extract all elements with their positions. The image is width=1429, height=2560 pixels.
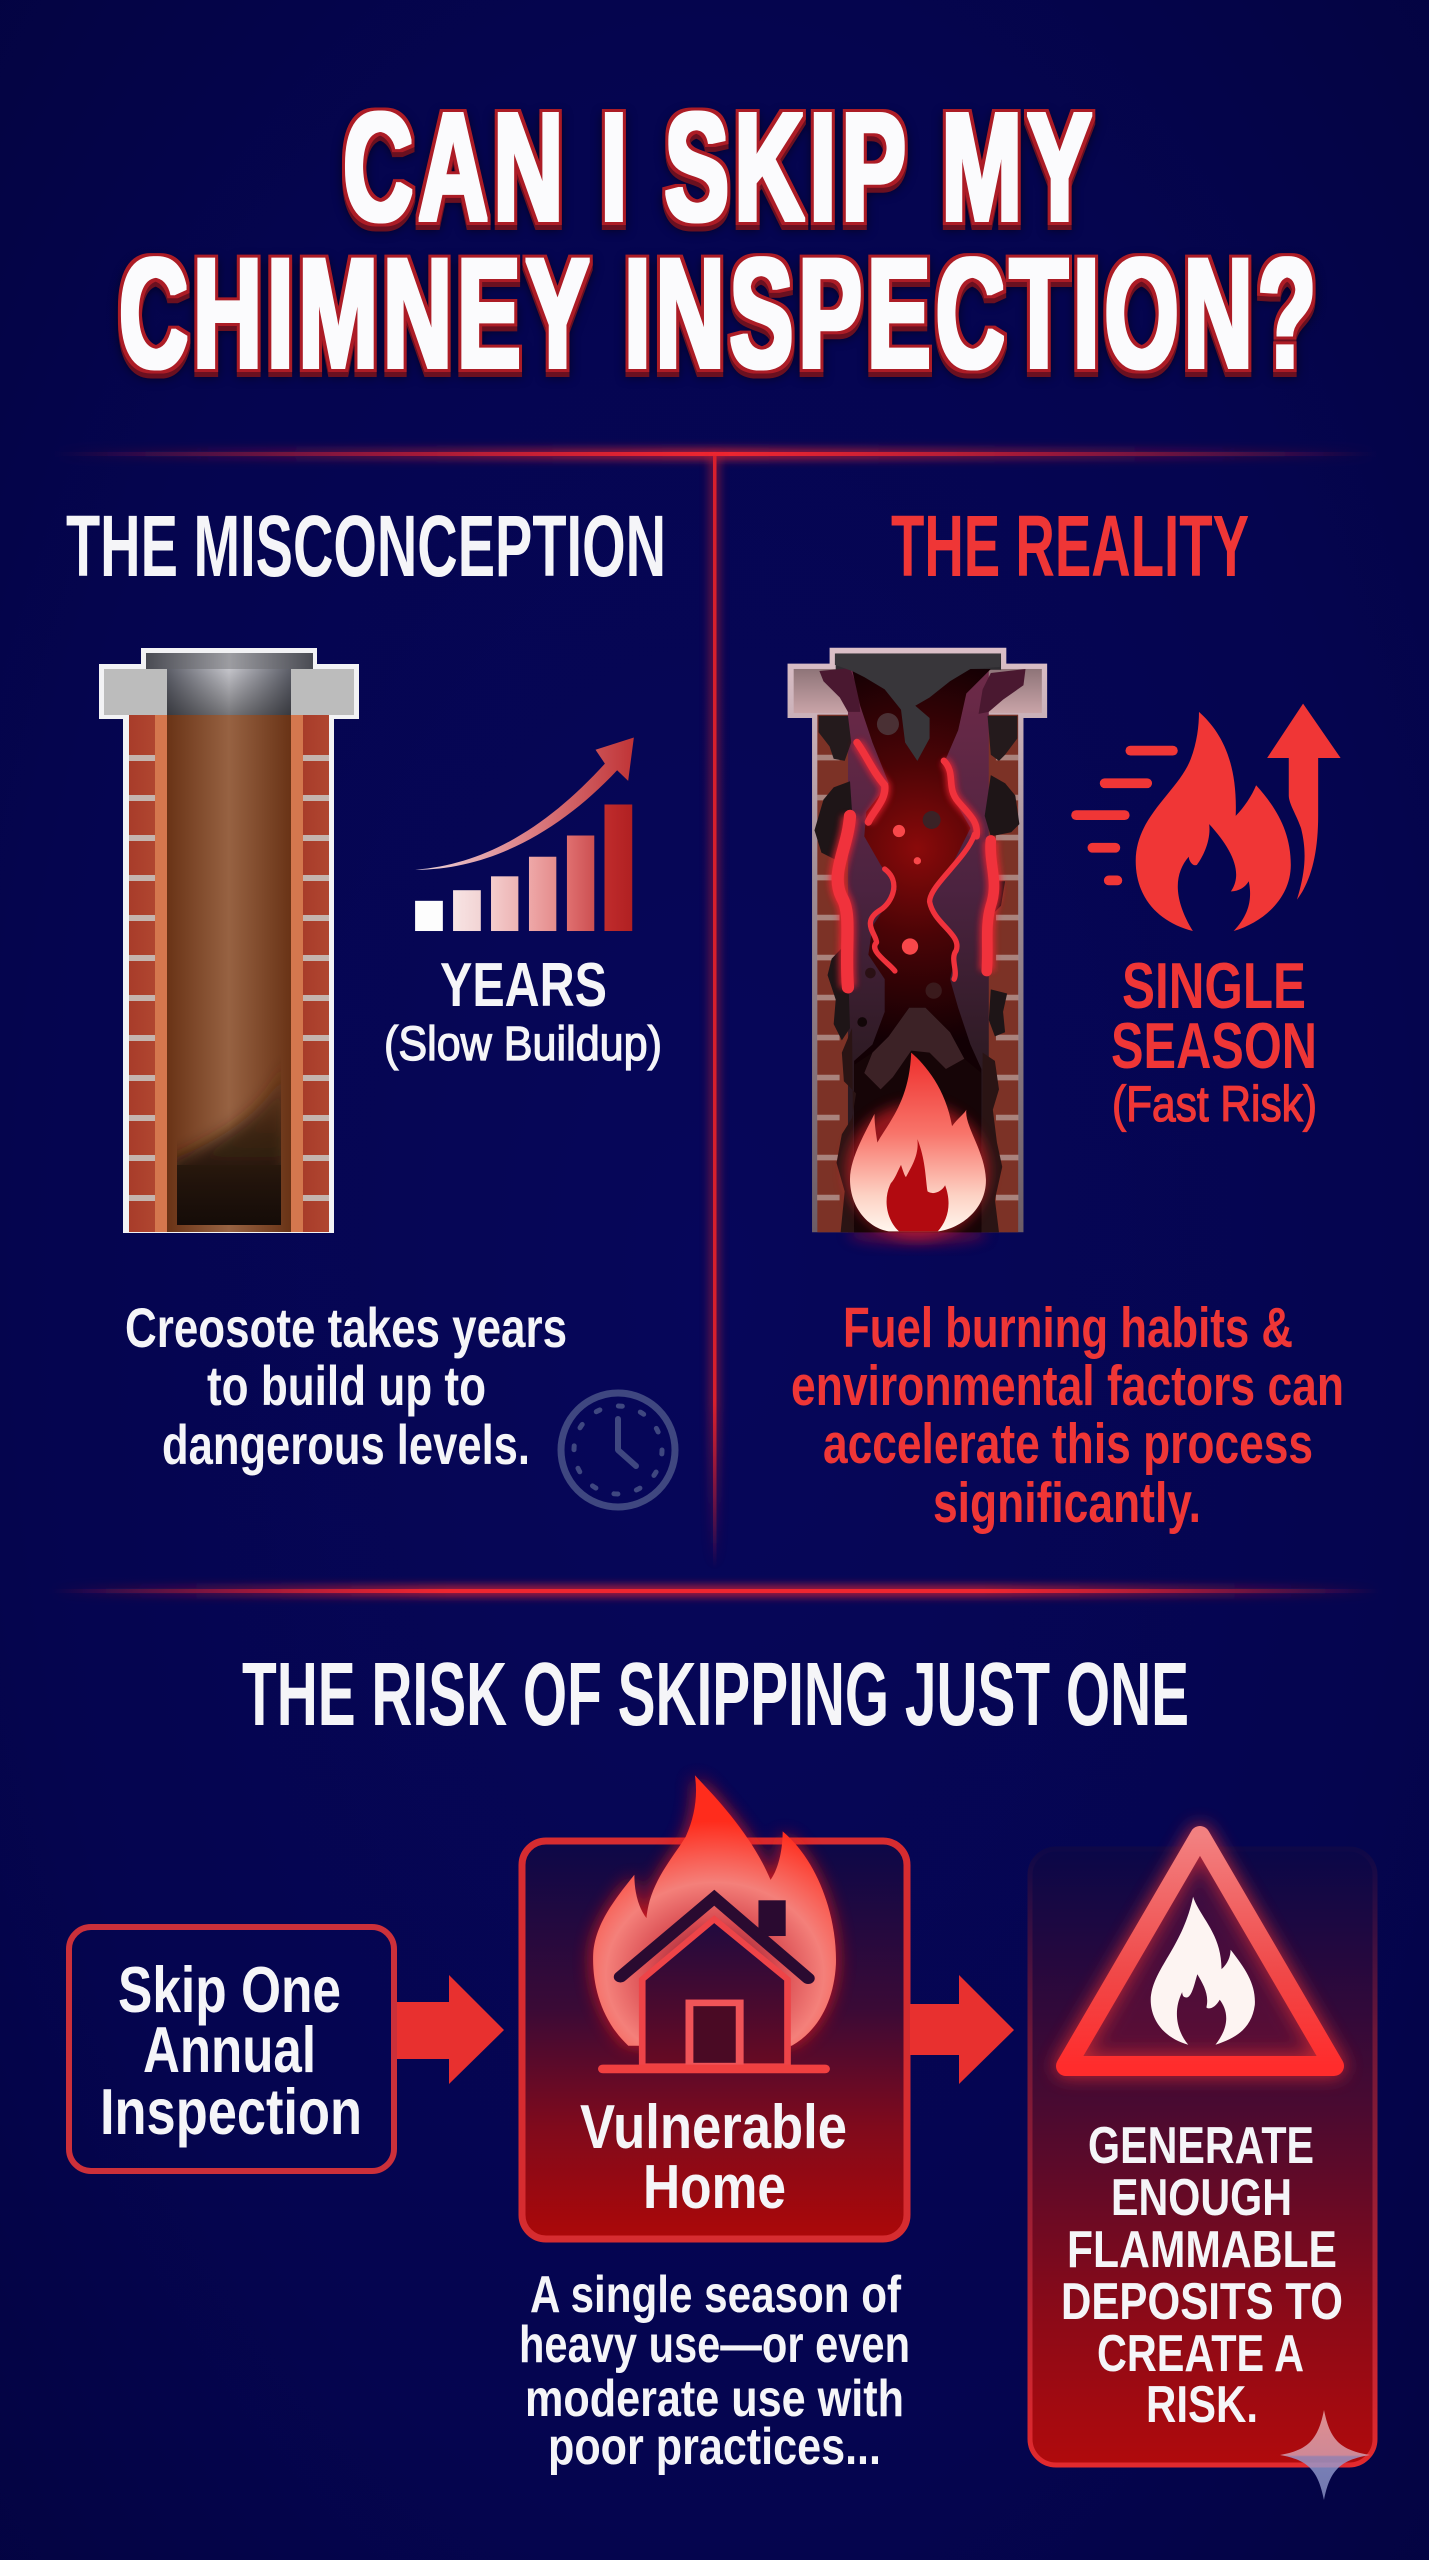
box: skip one annual inspection: Inspection (100, 2075, 362, 2148)
arrow: vulnerable to risk (910, 1975, 1014, 2084)
icon: warning triangle with flame (1066, 1836, 1334, 2066)
label: single season (1111, 949, 1317, 1132)
box: vulnerable home: Home (643, 2153, 786, 2222)
bar chart: slow buildup (415, 738, 634, 931)
label: years: YEARS (440, 951, 607, 1020)
box: skip one annual inspection: Skip One (118, 1953, 341, 2026)
box: vulnerable home (522, 1775, 907, 2239)
top divider (55, 450, 1376, 458)
label: single season: SINGLE (1122, 949, 1306, 1022)
text: creosote: Creosote takes years (125, 1296, 567, 1359)
panel: the reality (788, 498, 1344, 1535)
text: single season of heavy use: A single season of (530, 2266, 902, 2324)
label: single season: (Fast Risk) (1112, 1076, 1317, 1132)
vertical divider (710, 456, 719, 1568)
panel: the risk of skipping just one (69, 1645, 1375, 2476)
illustration: clean chimney cross-section (99, 648, 359, 1233)
panel: the misconception (66, 498, 675, 1507)
text: generate enough flammable deposits: ENOUGH (1111, 2169, 1292, 2227)
text: generate enough flammable deposits: DEPOSITS TO (1061, 2273, 1343, 2331)
icon: clock (561, 1393, 675, 1507)
text: single season of heavy use (519, 2266, 910, 2476)
text: creosote: dangerous levels. (162, 1413, 530, 1476)
text: creosote: to build up to (207, 1354, 486, 1417)
text: single season of heavy use: heavy use—or even (519, 2316, 910, 2374)
box: skip one annual inspection: Annual (143, 2013, 316, 2086)
arrow: skip to vulnerable (397, 1975, 504, 2084)
middle divider (51, 1587, 1380, 1595)
text: creosote (125, 1296, 567, 1476)
heading: the misconception: THE MISCONCEPTION (66, 498, 666, 595)
text: generate enough flammable deposits: FLAMMABLE (1067, 2221, 1337, 2279)
icon: fast flame with arrow and speed lines (1071, 704, 1341, 931)
icon: sparkle (1280, 2410, 1370, 2500)
text: fuel burning habits (791, 1296, 1344, 1535)
text: single season of heavy use: moderate use with (525, 2370, 904, 2428)
text: fuel burning habits: Fuel burning habits & (843, 1296, 1293, 1360)
text: single season of heavy use: poor practices... (548, 2418, 881, 2476)
title (119, 81, 1321, 401)
box: generate enough flammable deposits (1030, 1836, 1375, 2465)
label: slow buildup: (Slow Buildup) (384, 1018, 662, 1071)
text: generate enough flammable deposits: GENERATE (1088, 2117, 1314, 2175)
box: skip one annual inspection (69, 1927, 394, 2171)
text: generate enough flammable deposits: RISK. (1146, 2376, 1258, 2434)
label: vulnerable home: Vulnerable (580, 2093, 847, 2162)
text: generate enough flammable deposits: CREATE A (1097, 2325, 1304, 2383)
text: fuel burning habits: significantly. (933, 1471, 1201, 1535)
text: generate enough flammable deposits (1061, 2117, 1343, 2434)
icon: house on fire (593, 1775, 836, 2073)
label: single season: SEASON (1111, 1009, 1317, 1082)
illustration: burning chimney cross-section (788, 648, 1047, 1245)
